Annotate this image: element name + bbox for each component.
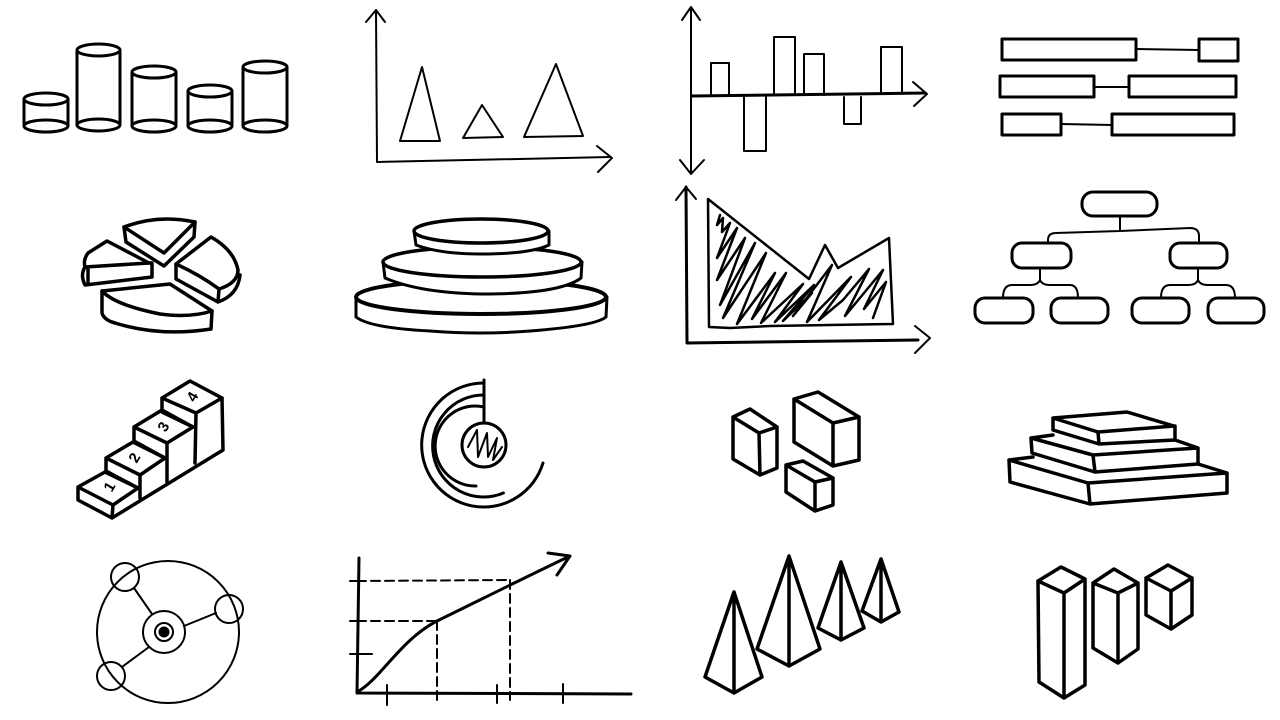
stepped pyramid <box>1009 412 1227 504</box>
cylinder bar chart <box>24 44 287 132</box>
triangle chart <box>366 10 612 172</box>
three 3D boxes <box>733 392 859 511</box>
timeline bars <box>1000 39 1238 135</box>
scribbled area chart <box>676 187 930 353</box>
positive and negative bar chart <box>680 7 927 174</box>
step numbers <box>101 389 203 495</box>
exploded 3D pie chart <box>82 219 240 332</box>
numbered isometric stairs <box>78 381 223 518</box>
step numbers: 3 <box>155 419 173 435</box>
isometric column chart <box>1038 565 1192 698</box>
growth line chart <box>350 553 631 705</box>
stacked disc podium <box>356 219 607 333</box>
step numbers: 1 <box>101 479 119 495</box>
step numbers: 2 <box>126 450 144 466</box>
organisation tree <box>975 192 1264 323</box>
pyramid chart <box>705 556 899 693</box>
radial arc chart <box>422 380 543 507</box>
hub network diagram <box>97 561 243 703</box>
step numbers: 4 <box>184 389 203 405</box>
